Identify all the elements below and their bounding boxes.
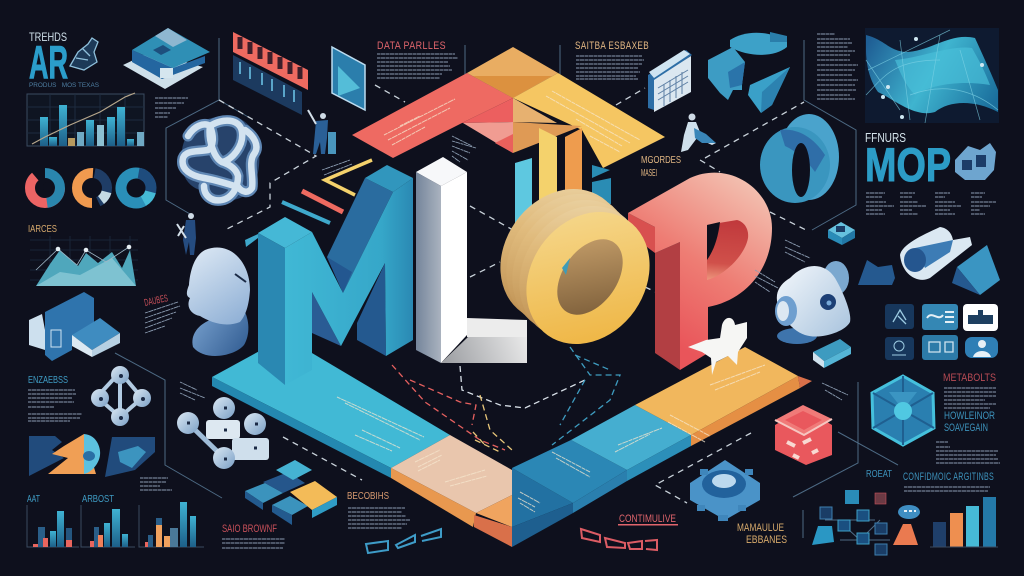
- icon: molecule 1: [91, 366, 151, 426]
- text block: said brownf: [222, 523, 285, 548]
- M: upper diagonal face: [327, 178, 393, 293]
- icon: small tray: [813, 339, 851, 368]
- bar chart: small left: AAT: [27, 494, 40, 505]
- text block: howleinor: HOWLEINOR: [944, 410, 995, 422]
- icon: hexagon network: [872, 376, 934, 445]
- text block: process: ENZAEBSS: [28, 375, 68, 386]
- text block: drivers: DAUBES: [143, 293, 169, 309]
- platform text: [337, 365, 765, 512]
- diagram: network: [803, 490, 890, 555]
- icon: blue arrow blocks: [105, 437, 155, 477]
- donut 3: [116, 168, 156, 208]
- text block: mamaulue: MAMAULUE: [737, 522, 784, 534]
- icon: red link outlines: [581, 529, 657, 550]
- text block: mamaulue: EBBANES: [746, 534, 787, 546]
- text block: [377, 54, 458, 78]
- platform: peach band: [391, 435, 512, 513]
- icon: knot: [181, 116, 259, 201]
- coloured dashed routes: [392, 347, 620, 452]
- roof slab: [352, 47, 665, 168]
- text block: feature columns: [866, 193, 996, 214]
- icon tile 2: [922, 304, 958, 330]
- heading: system esbaxeb: SAITBA ESBAXEB: [575, 40, 649, 52]
- text block: continuulive: CONTIMULIVE: [619, 513, 676, 525]
- text block: P note: [755, 240, 810, 292]
- donut 1: [30, 173, 60, 203]
- icon: sitting person: [681, 114, 716, 152]
- panel: trends header: [29, 30, 99, 89]
- icon: red server rack: [233, 32, 308, 115]
- text block: right note: [817, 34, 858, 99]
- icon grid: [885, 304, 998, 360]
- icon: molecule 2: [177, 397, 269, 469]
- back columns: [515, 128, 611, 232]
- text block: metabolts: METABOLTS: [943, 372, 996, 384]
- roof: red band: [352, 73, 513, 158]
- icon: cyan link outlines: [366, 529, 441, 553]
- icon: cylinder: [900, 227, 972, 280]
- bar chart: small right: [139, 502, 204, 547]
- heading: mgordes masei: MASEI: [641, 168, 657, 179]
- icon: seated figure: [70, 38, 98, 70]
- letter M: [258, 165, 413, 385]
- donut charts: [30, 168, 156, 208]
- bar chart: small middle: [81, 494, 135, 547]
- text block: center note: [452, 136, 476, 162]
- text block: small note by M: [322, 160, 352, 175]
- icon: dark block: [858, 260, 895, 285]
- text block: chart note: [155, 98, 188, 117]
- M: bright front: [285, 178, 413, 385]
- heading: trends: TREHDS: [29, 30, 67, 44]
- text block: drivers: [143, 293, 180, 333]
- platform: yellow section: [635, 347, 798, 435]
- panel: wave visual: [865, 28, 999, 123]
- platform: cyan band: [212, 337, 450, 468]
- heading: system esbaxeb: [575, 40, 649, 79]
- heading: roeat: ROEAT: [866, 469, 892, 480]
- icon: ring: [760, 114, 839, 203]
- icon tile 3: [963, 304, 998, 331]
- letter P: [628, 173, 772, 370]
- donut 2: [74, 170, 110, 206]
- icon: small cube: [828, 222, 855, 245]
- heading: data parlles: [377, 40, 458, 78]
- icon: white figure: [688, 318, 747, 375]
- M: left column: [258, 217, 312, 248]
- text block: howleinor: [944, 410, 995, 434]
- text block: [576, 56, 644, 79]
- heading: features: FFNURS: [865, 130, 906, 145]
- bar chart: small left: [27, 494, 79, 547]
- roof: inner facets: [462, 98, 513, 123]
- letter O: [475, 165, 675, 368]
- icon: person at server: [308, 110, 336, 154]
- text block: process: [28, 375, 82, 421]
- M: lower dark faces: [312, 292, 341, 346]
- text block: becobins: BECOBIHS: [347, 491, 389, 502]
- text block: right note: [822, 383, 848, 400]
- letter L: [416, 157, 527, 363]
- icon: blue gear: [690, 460, 760, 520]
- icon tile 5: [922, 335, 958, 360]
- heading: data parlles: DATA PARLLES: [377, 40, 446, 52]
- icon: red cube: [775, 405, 832, 465]
- platform: [212, 337, 812, 547]
- heading: mgordes masei: [641, 155, 681, 179]
- M: right column top: [365, 165, 413, 192]
- heading: AR: AR: [29, 36, 68, 88]
- area chart: [30, 236, 138, 286]
- icon: isometric book: [123, 28, 210, 89]
- bar chart: small middle: ARBOST: [82, 494, 114, 505]
- platform: blue sections: [512, 468, 573, 527]
- heading: confidmoic: [903, 471, 994, 491]
- icon: isometric tiles: [245, 460, 337, 525]
- bar chart: bottom right: [930, 497, 998, 547]
- icon tile 6: [965, 337, 998, 358]
- heading: lares: IARCES: [28, 224, 57, 235]
- text block: howleinor: SOAVEGAIN: [944, 422, 988, 434]
- icon: isometric blocks: [29, 292, 120, 361]
- connector lines: [115, 38, 898, 503]
- text block: description: [936, 442, 1000, 463]
- text block: small note: [140, 382, 205, 490]
- icon tile 4: [885, 337, 914, 360]
- heading: mgordes masei: MGORDES: [641, 155, 681, 166]
- icon: person with wrench: [177, 213, 196, 255]
- icon: angular block: [952, 245, 1000, 295]
- icon: tablet: [332, 47, 365, 110]
- roof text: [384, 91, 640, 152]
- roof: orange peak: [467, 47, 558, 98]
- roof: yellow band: [513, 73, 665, 168]
- icon: 3D segments: [708, 32, 790, 113]
- caption: PRODUS MOS TEXAS: [29, 83, 99, 89]
- bar chart: trends: [27, 93, 144, 146]
- icon: orange arrow blocks: [29, 434, 100, 476]
- icon: human head: [187, 248, 250, 356]
- text block: said brownf: SAIO BROWNF: [222, 523, 277, 535]
- icon tile 1: [885, 304, 914, 329]
- icon: orange person: [893, 505, 920, 545]
- accent bars: [245, 160, 372, 247]
- icon: robot head: [775, 261, 850, 344]
- icon: circuit block: [955, 143, 996, 180]
- text block: mamaulue: [737, 522, 787, 546]
- heading: MOP: MOP: [865, 138, 951, 191]
- text block: becobins: [347, 491, 410, 528]
- icon: calendar: [648, 50, 692, 112]
- text block: metabolts: [943, 372, 996, 408]
